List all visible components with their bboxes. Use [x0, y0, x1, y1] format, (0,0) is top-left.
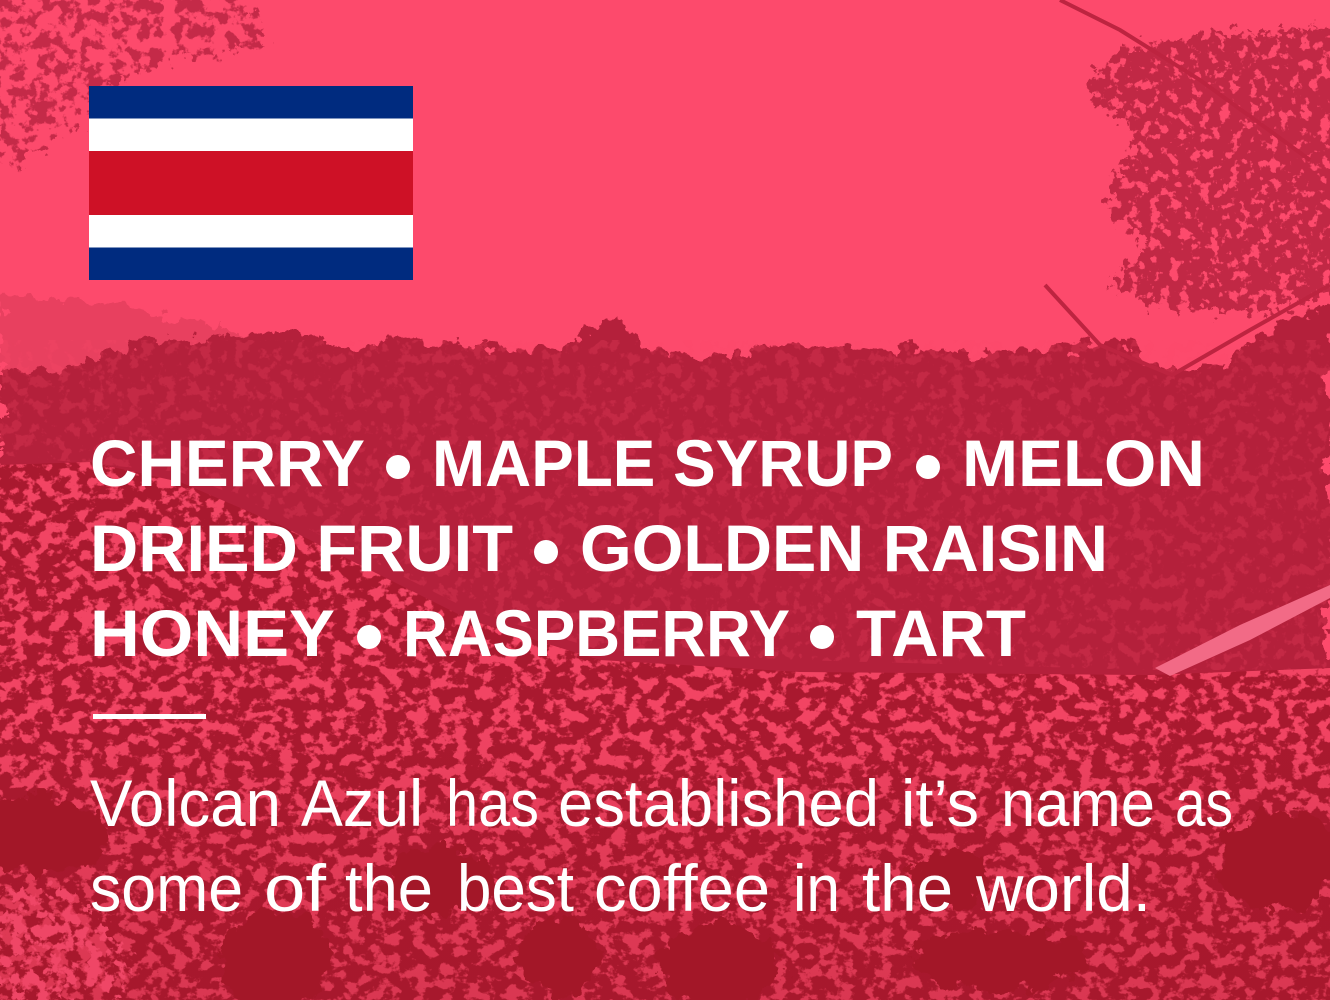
description text: has: [446, 766, 539, 840]
flavor notes heading: CHERRY: [90, 426, 365, 500]
description text: world.: [975, 851, 1151, 925]
flag of Costa Rica: [89, 86, 413, 280]
flavor notes heading: DRIED FRUIT: [90, 511, 513, 585]
lower field shade: [0, 720, 1330, 1000]
coffee field: dark base: [0, 462, 1330, 1000]
pale ground patch: [0, 888, 130, 1000]
description text: of: [264, 851, 327, 925]
flavor notes heading: [90, 426, 1205, 670]
flavor notes heading: GOLDEN RAISIN: [580, 511, 1108, 585]
background: tree canopy top left: [0, 0, 270, 170]
description text: best: [457, 851, 574, 925]
description text: it’s: [901, 766, 979, 840]
flavor notes heading: TART: [856, 596, 1026, 670]
description text: Azul: [301, 766, 423, 840]
coffee field: leaves: [0, 455, 1330, 1000]
background: coffee farm landscape: [0, 292, 1330, 1000]
fallen log: [1155, 585, 1330, 676]
flavor notes heading: HONEY: [90, 596, 335, 670]
background: tree canopy top right: [1045, 0, 1330, 375]
distant hazy hills: [0, 292, 280, 440]
description text: name: [1001, 766, 1155, 840]
flavor notes heading: MAPLE SYRUP: [432, 426, 893, 500]
description text: established: [558, 766, 879, 840]
description text: Volcan: [90, 766, 281, 840]
description text: some: [90, 851, 243, 925]
description text: the: [345, 851, 433, 925]
flavor notes heading: RASPBERRY: [403, 596, 790, 670]
flavor notes heading: MELON: [962, 426, 1205, 500]
forest highlights: [0, 340, 1330, 680]
description text: in: [793, 851, 840, 925]
tree line: [0, 308, 1330, 700]
dark shade under the bushes: [0, 797, 1330, 1000]
short divider: [93, 714, 206, 719]
description text: coffee: [594, 851, 770, 925]
description text: [90, 766, 1233, 925]
description text: as: [1175, 766, 1233, 840]
description text: the: [862, 851, 953, 925]
